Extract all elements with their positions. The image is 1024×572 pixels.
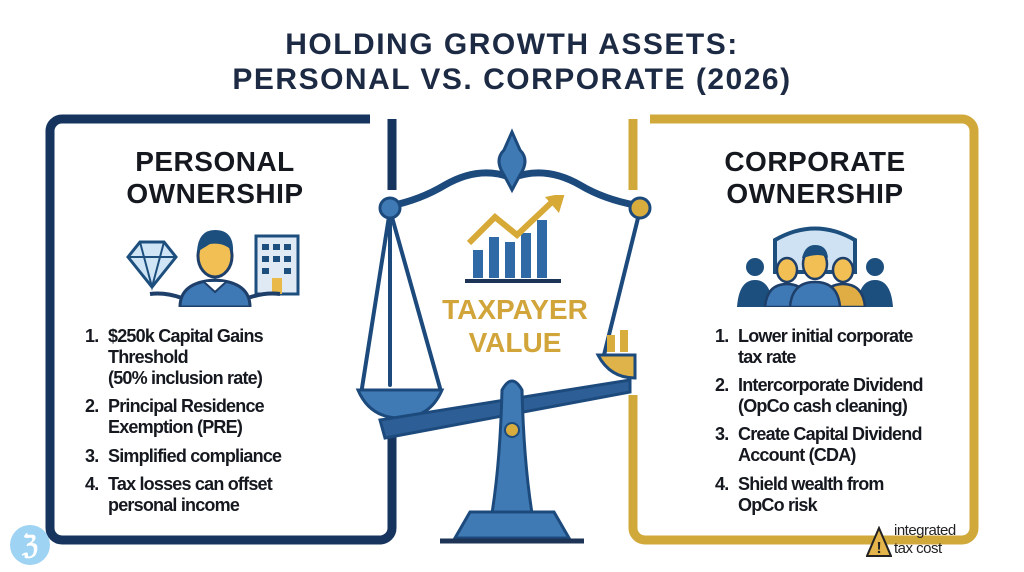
- text: 1.: [715, 326, 728, 346]
- icon: logo: ℨ: [22, 530, 38, 560]
- title: HOLDING GROWTH ASSETS:: [285, 28, 739, 61]
- text: 2.: [715, 375, 728, 395]
- icon: logo: [10, 525, 50, 565]
- text: 3.: [85, 446, 98, 466]
- callout: integrated tax cost: tax cost: [894, 540, 942, 557]
- heading: personal ownership: OWNERSHIP: [126, 178, 304, 209]
- text: taxpayer value: TAXPAYER: [442, 294, 588, 325]
- list: personal ownership: Tax losses can offset: [108, 474, 272, 494]
- text: taxpayer value: VALUE: [469, 327, 561, 358]
- list: corporate ownership: OpCo risk: [738, 495, 817, 515]
- list: corporate ownership: Intercorporate Dividend: [738, 375, 923, 395]
- title: PERSONAL VS. CORPORATE (2026): [232, 63, 792, 96]
- text: 4.: [85, 474, 98, 494]
- heading: corporate ownership: CORPORATE: [724, 146, 906, 177]
- list: personal ownership: personal income: [108, 495, 239, 515]
- list: corporate ownership: tax rate: [738, 347, 796, 367]
- list: corporate ownership: Shield wealth from: [738, 474, 884, 494]
- list: corporate ownership: Account (CDA): [738, 445, 856, 465]
- text: 2.: [85, 396, 98, 416]
- icon: corporate team with shield: [737, 226, 893, 307]
- text: 1.: [85, 326, 98, 346]
- heading: corporate ownership: OWNERSHIP: [726, 178, 904, 209]
- list: corporate ownership: Lower initial corporate: [738, 326, 913, 346]
- list: corporate ownership: (OpCo cash cleaning): [738, 396, 907, 416]
- heading: personal ownership: PERSONAL: [135, 146, 295, 177]
- list: personal ownership: $250k Capital Gains: [108, 326, 263, 346]
- list: personal ownership: Simplified compliance: [108, 446, 281, 466]
- list: personal ownership: Exemption (PRE): [108, 417, 242, 437]
- list: personal ownership: Principal Residence: [108, 396, 264, 416]
- heading: corporate ownership: [724, 146, 906, 209]
- list: personal ownership: (50% inclusion rate): [108, 368, 262, 388]
- title: [232, 28, 792, 96]
- callout: integrated tax cost: [866, 522, 956, 557]
- callout: integrated tax cost: !: [876, 540, 882, 557]
- text: taxpayer value: [442, 294, 588, 358]
- callout: integrated tax cost: integrated: [894, 522, 956, 539]
- text: 4.: [715, 474, 728, 494]
- icon: person with diamond and building: [126, 230, 300, 307]
- list: personal ownership: [85, 326, 282, 515]
- text: 3.: [715, 424, 728, 444]
- list: personal ownership: Threshold: [108, 347, 188, 367]
- list: corporate ownership: [715, 326, 923, 515]
- icon: growth chart: [465, 195, 564, 283]
- list: corporate ownership: Create Capital Dividend: [738, 424, 922, 444]
- heading: personal ownership: [126, 146, 304, 209]
